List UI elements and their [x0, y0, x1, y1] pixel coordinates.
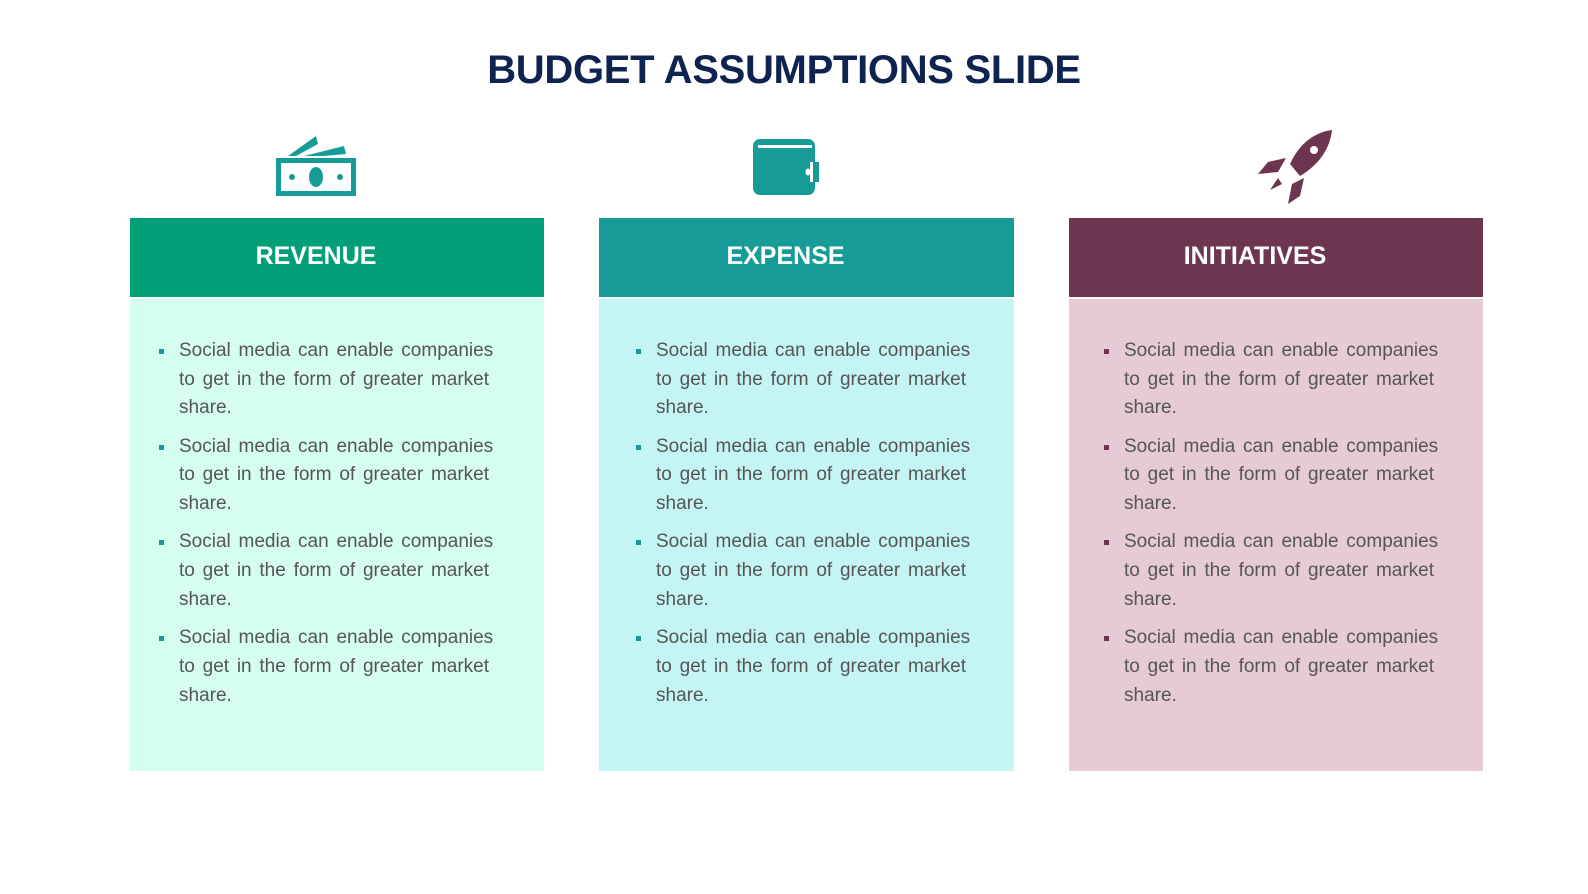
text block: initiatives bullets: Social media can enable companies: [1124, 531, 1438, 552]
text block: revenue bullets: share.: [179, 589, 232, 610]
title: BUDGET ASSUMPTIONS SLIDE: [487, 48, 1081, 92]
text block: initiatives bullets: Social media can enable companies: [1124, 340, 1438, 361]
text block: initiatives bullets: share.: [1124, 397, 1177, 418]
text block: expense bullets: to get in the form of greater market: [656, 656, 966, 677]
panel: revenue: [130, 218, 544, 771]
text block: revenue bullets: Social media can enable companies: [179, 627, 493, 648]
text block: initiatives bullets: share.: [1124, 589, 1177, 610]
text block: expense bullets: share.: [656, 589, 709, 610]
text block: revenue bullets: to get in the form of greater market: [179, 656, 489, 677]
text block: expense bullets: Social media can enable companies: [656, 627, 970, 648]
text block: revenue bullets: to get in the form of greater market: [179, 560, 489, 581]
heading: revenue: REVENUE: [256, 242, 376, 270]
text block: initiatives bullets: Social media can enable companies: [1124, 627, 1438, 648]
icon: wallet: [753, 139, 819, 195]
text block: expense bullets: to get in the form of greater market: [656, 560, 966, 581]
text block: expense bullets: to get in the form of greater market: [656, 369, 966, 390]
text block: expense bullets: share.: [656, 685, 709, 706]
text block: expense bullets: share.: [656, 493, 709, 514]
text block: initiatives bullets: share.: [1124, 685, 1177, 706]
panel: expense: [599, 218, 1014, 771]
text block: initiatives bullets: to get in the form of greater market: [1124, 560, 1434, 581]
text block: revenue bullets: share.: [179, 493, 232, 514]
text block: expense bullets: share.: [656, 397, 709, 418]
text block: expense bullets: Social media can enable companies: [656, 340, 970, 361]
text block: revenue bullets: share.: [179, 397, 232, 418]
text block: revenue bullets: Social media can enable companies: [179, 436, 493, 457]
text block: initiatives bullets: [1069, 299, 1483, 771]
heading: initiatives: [1069, 218, 1483, 297]
panel: initiatives: [1069, 218, 1483, 771]
text block: initiatives bullets: to get in the form of greater market: [1124, 464, 1434, 485]
heading: revenue: [130, 218, 544, 297]
text block: revenue bullets: to get in the form of greater market: [179, 464, 489, 485]
text block: revenue bullets: Social media can enable companies: [179, 340, 493, 361]
icon: money: [276, 136, 356, 196]
icon: rocket: [1258, 130, 1332, 204]
text block: expense bullets: Social media can enable companies: [656, 436, 970, 457]
heading: initiatives: INITIATIVES: [1184, 242, 1326, 270]
text block: expense bullets: to get in the form of greater market: [656, 464, 966, 485]
text block: revenue bullets: Social media can enable companies: [179, 531, 493, 552]
text block: revenue bullets: [130, 299, 544, 771]
text block: initiatives bullets: to get in the form of greater market: [1124, 369, 1434, 390]
heading: expense: EXPENSE: [726, 242, 845, 270]
text block: revenue bullets: share.: [179, 685, 232, 706]
text block: initiatives bullets: to get in the form of greater market: [1124, 656, 1434, 677]
text block: initiatives bullets: Social media can enable companies: [1124, 436, 1438, 457]
text block: revenue bullets: to get in the form of greater market: [179, 369, 489, 390]
heading: expense: [599, 218, 1014, 297]
text block: initiatives bullets: share.: [1124, 493, 1177, 514]
text block: expense bullets: Social media can enable companies: [656, 531, 970, 552]
text block: expense bullets: [599, 299, 1014, 771]
